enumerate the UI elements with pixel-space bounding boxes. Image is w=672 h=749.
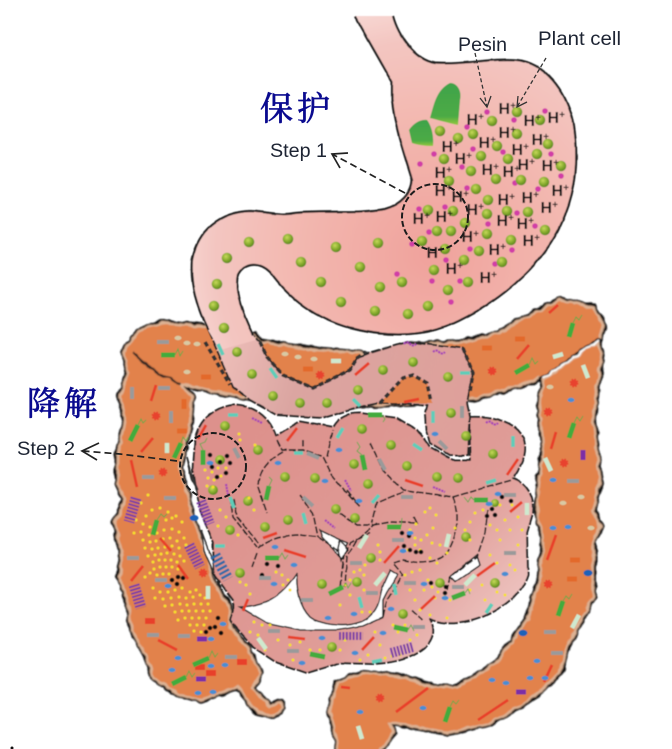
hydrogen ions: H xyxy=(434,165,446,182)
hydrogen ions: H xyxy=(524,113,535,130)
hydrogen ions: + xyxy=(535,113,541,124)
black clusters xyxy=(170,453,513,635)
hydrogen ions: + xyxy=(473,229,479,240)
panel: stomach xyxy=(192,16,576,350)
hydrogen ions: H xyxy=(478,135,490,152)
panel: large intestine xyxy=(115,300,604,749)
hydrogen ions: + xyxy=(457,261,463,272)
hydrogen ions: H xyxy=(466,112,478,129)
hydrogen ions: + xyxy=(563,183,569,194)
hydrogen ions: H xyxy=(446,261,457,278)
colon seen through duodenum xyxy=(380,375,432,403)
hydrogen ions: + xyxy=(543,132,549,143)
green food particles in intestine xyxy=(208,347,500,652)
label: step 2: Step 2 xyxy=(17,439,75,460)
panel: small intestine xyxy=(187,405,533,673)
purple receptor combs xyxy=(129,498,413,653)
gaps between intestine loops xyxy=(187,457,480,630)
hydrogen ions: H xyxy=(498,101,510,118)
hydrogen ions: H xyxy=(452,189,463,206)
hydrogen ions: + xyxy=(447,209,453,220)
arrow: step 2 xyxy=(82,443,177,461)
stomach fill xyxy=(192,16,576,350)
orange blocks xyxy=(177,339,580,579)
hydrogen ions: H xyxy=(540,200,552,217)
hydrogen ions: + xyxy=(528,216,534,227)
hydrogen ions: + xyxy=(478,202,484,213)
hydrogen ions: H xyxy=(436,209,447,226)
label: step 1: Step 1 xyxy=(270,141,327,162)
yellow metabolite dots xyxy=(134,434,522,660)
digestive tract illustration xyxy=(115,16,604,749)
hydrogen ions: H xyxy=(552,183,563,200)
arrow: step 1 xyxy=(332,153,405,193)
purple squiggles xyxy=(226,342,498,528)
icon: plant cell xyxy=(409,83,461,146)
green bacteria xyxy=(130,323,574,722)
hydrogen ions: + xyxy=(500,242,506,253)
hydrogen ions: + xyxy=(491,270,497,281)
panel: duodenum xyxy=(205,330,473,455)
teal bacteria xyxy=(215,344,513,662)
hydrogen ions: + xyxy=(533,190,539,201)
pepsin particles xyxy=(394,108,564,305)
hydrogen ions: + xyxy=(493,162,499,173)
hydrogen ions: H xyxy=(522,233,534,250)
duodenum band xyxy=(208,330,473,455)
hydrogen ions: + xyxy=(463,189,469,200)
hydrogen ions: + xyxy=(552,200,558,211)
hydrogen ions: + xyxy=(453,139,459,150)
hydrogen ions: + xyxy=(424,211,430,222)
arrow: pesin xyxy=(475,53,491,107)
label: pesin: Pesin xyxy=(458,35,507,56)
hydrogen ions: + xyxy=(438,245,444,256)
gray bacteria xyxy=(127,342,579,657)
hydrogen ions: H xyxy=(516,216,528,233)
fold lines xyxy=(213,430,512,620)
hydrogen ions: H xyxy=(462,229,473,246)
small intestine body xyxy=(193,405,533,673)
hydrogen ions: + xyxy=(490,135,496,146)
hydrogen ions: H xyxy=(412,211,424,228)
small mark at bottom edge xyxy=(10,746,14,749)
heading: degradation: 降解 xyxy=(27,386,101,423)
label: plant cell: Plant cell xyxy=(538,28,621,50)
hydrogen ions: H xyxy=(502,164,514,181)
colon outline and fill xyxy=(115,300,604,749)
hydrogen ions: + xyxy=(529,157,535,168)
hydrogen ions: H xyxy=(518,157,529,174)
hydrogen ions: + xyxy=(466,151,472,162)
hydrogen ions: H xyxy=(498,125,510,142)
beige ovals xyxy=(174,336,594,530)
hydrogen ions: H xyxy=(532,132,543,149)
hydrogen ions: + xyxy=(514,164,520,175)
hydrogen ions: + xyxy=(508,213,514,224)
hydrogen ions: H xyxy=(480,270,491,287)
hydrogen ions: H xyxy=(548,110,559,127)
hydrogen ions: H xyxy=(512,142,523,159)
hydrogen ions: H xyxy=(482,162,493,179)
hydrogen ions: + xyxy=(534,233,540,244)
purple blocks xyxy=(196,450,583,692)
arrow: plant cell xyxy=(517,58,546,107)
red star particles xyxy=(152,368,578,702)
hydrogen ions: + xyxy=(523,142,529,153)
hydrogen ions: + xyxy=(510,125,516,136)
hydrogen ions: H xyxy=(542,158,553,175)
hydrogen ions: H xyxy=(522,190,533,207)
hydrogen ions: + xyxy=(509,192,515,203)
callout: step 2 circle xyxy=(180,433,246,499)
green food particles xyxy=(209,107,566,333)
dark bead edges xyxy=(205,342,473,403)
blue ovals xyxy=(164,398,592,714)
hydrogen ions: H xyxy=(426,245,438,262)
hydrogen ions: H xyxy=(442,139,453,156)
callout: step 1 circle xyxy=(402,184,468,250)
hydrogen ions: H xyxy=(488,242,500,259)
bacteria flagella xyxy=(138,315,583,707)
gut contents: particles xyxy=(127,305,594,739)
hydrogen ions xyxy=(412,101,569,287)
mint bacteria xyxy=(167,354,588,739)
hydrogen ions: + xyxy=(553,158,559,169)
heading: protection: 保护 xyxy=(260,91,334,128)
hydrogen ions: H xyxy=(434,183,446,200)
hydrogen ions: + xyxy=(478,112,484,123)
blue receptor comb xyxy=(215,555,228,579)
hydrogen ions: + xyxy=(559,110,565,121)
hydrogen ions: H xyxy=(498,192,509,209)
red blocks xyxy=(145,621,247,673)
hydrogen ions: + xyxy=(446,165,452,176)
hydrogen ions: H xyxy=(454,151,466,168)
red bacteria xyxy=(131,305,558,720)
hydrogen ions: + xyxy=(510,101,516,112)
hydrogen ions: H xyxy=(466,202,478,219)
stomach outline xyxy=(192,16,576,335)
hydrogen ions: + xyxy=(446,183,452,194)
hydrogen ions: H xyxy=(496,213,508,230)
